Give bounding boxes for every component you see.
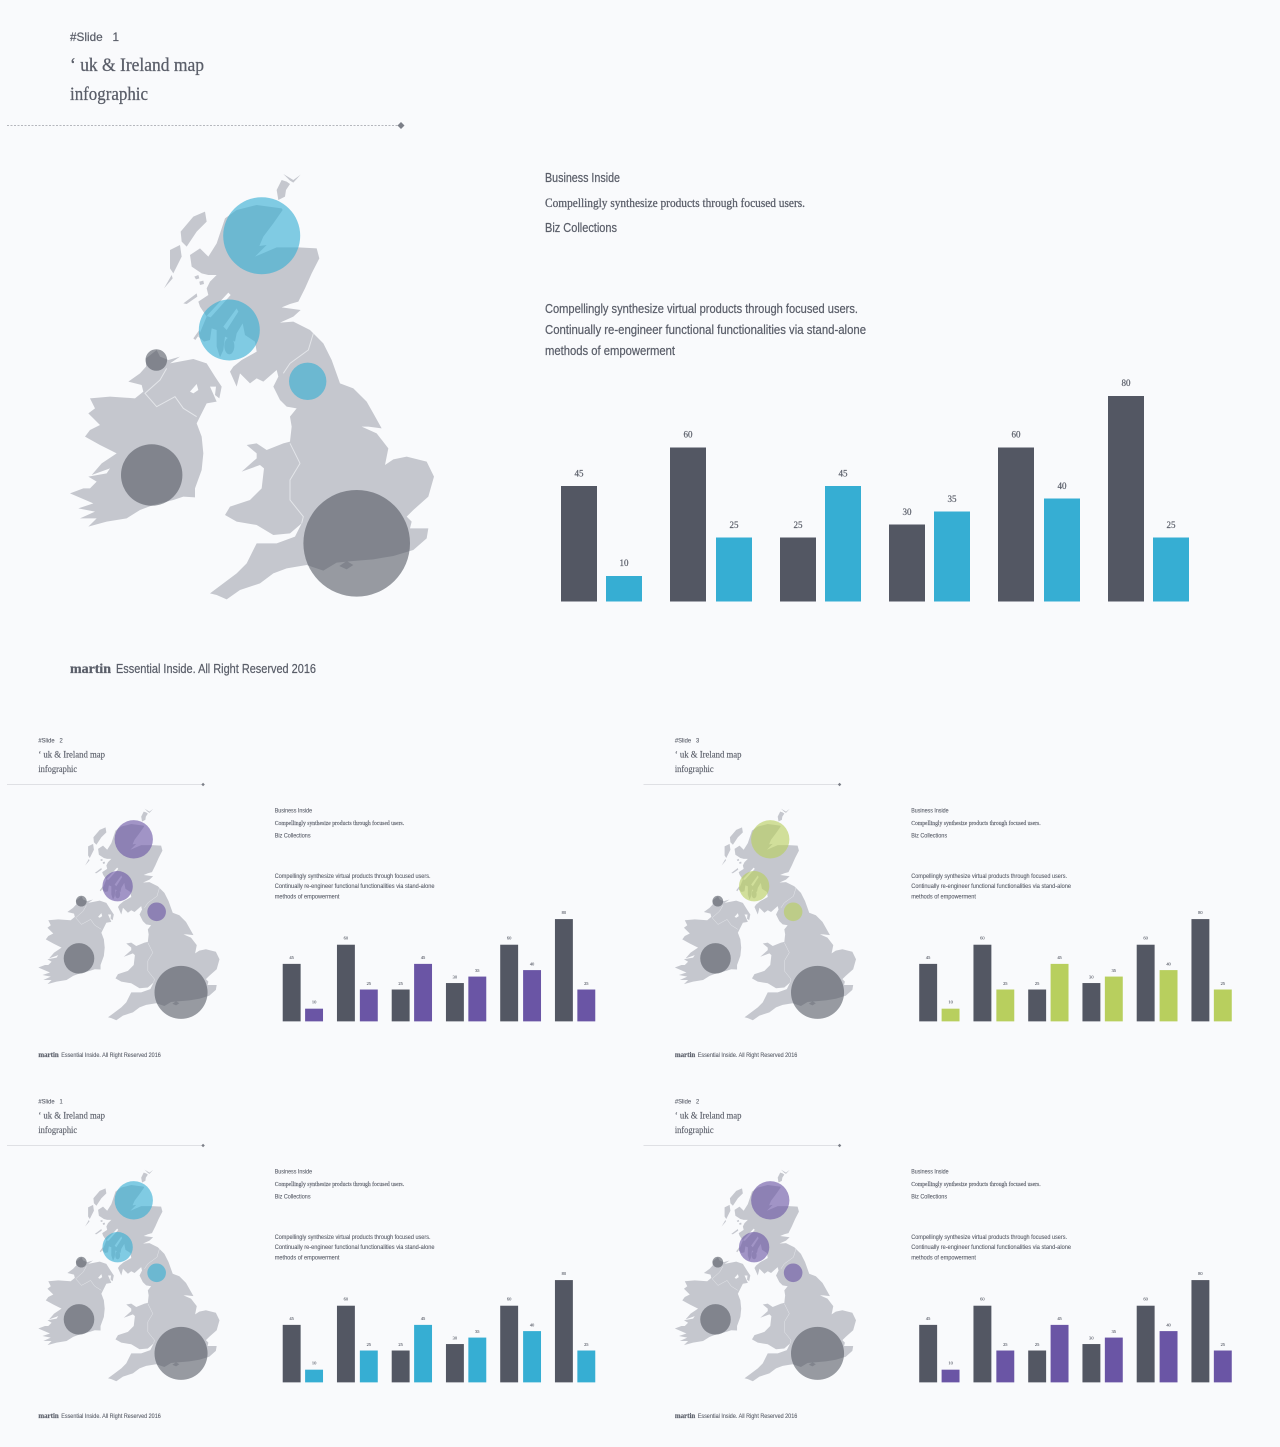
bar chart: 60 (344, 1297, 349, 1302)
text block: description: Continually re-engineer functional functionalities via stand-alone (545, 323, 866, 337)
divider with diamond (7, 122, 404, 129)
bar chart: 25 (1003, 981, 1008, 986)
footer: martin (675, 1412, 695, 1420)
bar chart: 25 (584, 981, 589, 986)
bar chart: 45 (289, 1316, 295, 1321)
footer: martin (38, 1051, 59, 1059)
bar chart: 25 (1221, 1342, 1226, 1347)
text block: business inside: Business Inside (911, 1169, 949, 1176)
text block: description: Compellingly synthesize virtual products through focused users. (275, 1234, 431, 1241)
bar chart (919, 1271, 1232, 1382)
bar chart: 25 (398, 1342, 404, 1347)
slide heading: ‘ uk & Ireland map (675, 1111, 742, 1121)
text block: business inside (545, 171, 805, 235)
text block: business inside: Compellingly synthesize products through focused users. (275, 1181, 405, 1188)
divider with diamond (7, 1144, 205, 1147)
text block: business inside: Business Inside (275, 808, 313, 815)
bar chart: 60 (507, 1297, 512, 1302)
bar chart: 80 (562, 1271, 567, 1276)
bar chart: 80 (1122, 378, 1131, 388)
bar chart: 40 (1166, 1322, 1172, 1327)
bar chart: 30 (902, 507, 912, 517)
slide heading: #Slide 3 (675, 738, 700, 744)
text block: business inside (275, 1169, 405, 1200)
divider with diamond (7, 783, 205, 786)
text block: description: Compellingly synthesize virtual products through focused users. (275, 873, 431, 880)
bar chart: 10 (620, 558, 629, 568)
bar chart: 60 (507, 936, 512, 941)
slide heading: #Slide 1 (70, 30, 119, 44)
bar chart: 35 (1112, 968, 1117, 973)
text block: business inside: Biz Collections (911, 832, 947, 839)
bar chart: 25 (1221, 981, 1226, 986)
slide heading (38, 738, 105, 775)
text block: business inside: Compellingly synthesize products through focused users. (911, 820, 1041, 827)
bar chart: 35 (475, 968, 480, 973)
slide heading: #Slide 1 (38, 1099, 63, 1105)
text block: description: Continually re-engineer functional functionalities via stand-alone (275, 1244, 435, 1251)
text block: business inside: Business Inside (275, 1169, 313, 1176)
text block: description: methods of empowerment (275, 1255, 340, 1262)
text block: business inside: Compellingly synthesize products through focused users. (911, 1181, 1041, 1188)
slide heading: ‘ uk & Ireland map (38, 750, 105, 760)
footer (38, 1412, 161, 1420)
text block: business inside: Biz Collections (545, 221, 617, 235)
slide 3 (small, green) (643, 738, 1232, 1059)
bar chart: 40 (530, 1322, 535, 1327)
text block: business inside (911, 1169, 1041, 1200)
footer (70, 662, 316, 677)
footer: Essential Inside. All Right Reserved 2016 (61, 1413, 161, 1420)
bar chart: 10 (312, 1361, 317, 1366)
slide heading (38, 1099, 105, 1136)
footer: martin (70, 662, 111, 677)
bar chart: 25 (367, 1342, 372, 1347)
slide heading (70, 30, 204, 105)
bar chart: 30 (1089, 1335, 1094, 1340)
text block: description: Compellingly synthesize virtual products through focused users. (911, 873, 1067, 880)
footer: Essential Inside. All Right Reserved 2016 (698, 1413, 798, 1420)
footer: Essential Inside. All Right Reserved 2016 (698, 1052, 798, 1059)
text block: description: Compellingly synthesize virtual products through focused users. (545, 302, 858, 316)
text block: business inside: Biz Collections (275, 1193, 311, 1200)
bar chart: 35 (948, 494, 957, 504)
divider with diamond (643, 783, 841, 786)
slide heading: infographic (38, 764, 77, 775)
bar chart: 80 (562, 910, 567, 915)
bar chart: 35 (1112, 1329, 1117, 1334)
bar chart: 25 (1003, 1342, 1008, 1347)
bar chart: 60 (344, 936, 349, 941)
text block: description: methods of empowerment (545, 344, 675, 358)
text block: business inside: Biz Collections (911, 1193, 947, 1200)
bar chart: 45 (421, 955, 426, 960)
slide heading (675, 1099, 742, 1136)
slide heading: infographic (38, 1125, 77, 1136)
slide heading: #Slide 2 (675, 1099, 700, 1105)
text block: business inside: Business Inside (545, 171, 620, 185)
footer (675, 1412, 798, 1420)
bar chart: 25 (794, 520, 803, 530)
text block: description (545, 302, 866, 358)
slide heading: infographic (675, 764, 714, 775)
bar chart: 25 (1035, 1342, 1040, 1347)
footer: martin (675, 1051, 695, 1059)
bar chart: 40 (1058, 481, 1067, 491)
bar chart: 45 (838, 468, 848, 478)
footer (675, 1051, 798, 1059)
text block: description (911, 1234, 1071, 1262)
bar chart: 35 (475, 1329, 480, 1334)
bar chart: 45 (926, 1316, 931, 1321)
footer: Essential Inside. All Right Reserved 2016 (61, 1052, 161, 1059)
bar chart: 25 (367, 981, 372, 986)
bar chart: 80 (1198, 910, 1203, 915)
bar chart: 10 (948, 1000, 954, 1005)
bar chart: 10 (948, 1361, 954, 1366)
map of UK and Ireland with bubbles (38, 809, 219, 1020)
slide heading: ‘ uk & Ireland map (675, 750, 742, 760)
text block: description: Continually re-engineer functional functionalities via stand-alone (911, 1244, 1071, 1251)
bar chart: 25 (1166, 520, 1176, 530)
bar chart: 60 (1012, 430, 1021, 440)
slide 1 (large, blue) (7, 30, 1189, 677)
text block: description: Compellingly synthesize virtual products through focused users. (911, 1234, 1067, 1241)
text block: business inside (911, 808, 1041, 839)
bar chart: 40 (530, 961, 535, 966)
bar chart (283, 910, 595, 1021)
slide 5 (small, purple) (643, 1099, 1232, 1420)
bar chart: 60 (1143, 1297, 1149, 1302)
footer (38, 1051, 161, 1059)
footer: martin (38, 1412, 59, 1420)
slide 2 (small, purple) (7, 738, 595, 1059)
bar chart: 25 (1035, 981, 1040, 986)
bar chart: 60 (980, 936, 985, 941)
text block: description (275, 1234, 435, 1262)
footer: Essential Inside. All Right Reserved 2016 (116, 662, 316, 676)
text block: description: Continually re-engineer functional functionalities via stand-alone (275, 883, 435, 890)
bar chart: 45 (1057, 955, 1063, 960)
slide heading: infographic (675, 1125, 714, 1136)
bar chart: 45 (574, 468, 584, 478)
bar chart: 45 (926, 955, 931, 960)
bar chart: 40 (1166, 961, 1172, 966)
text block: business inside: Biz Collections (275, 832, 311, 839)
bar chart: 80 (1198, 1271, 1203, 1276)
text block: description: methods of empowerment (911, 1255, 976, 1262)
slide heading: ‘ uk & Ireland map (70, 55, 204, 76)
bar chart: 45 (421, 1316, 426, 1321)
bar chart: 25 (398, 981, 404, 986)
bar chart: 30 (453, 1335, 458, 1340)
bar chart (919, 910, 1232, 1021)
bar chart: 60 (1143, 936, 1149, 941)
map of UK and Ireland with bubbles (38, 1170, 219, 1381)
map of UK and Ireland with bubbles (675, 809, 856, 1020)
bar chart: 25 (730, 520, 739, 530)
divider with diamond (643, 1144, 841, 1147)
bar chart: 60 (980, 1297, 985, 1302)
bar chart: 25 (584, 1342, 589, 1347)
text block: business inside: Compellingly synthesize products through focused users. (275, 820, 405, 827)
bar chart: 30 (453, 974, 458, 979)
map of UK and Ireland with bubbles (70, 174, 434, 599)
bar chart: 10 (312, 1000, 317, 1005)
text block: description (275, 873, 435, 901)
text block: business inside: Business Inside (911, 808, 949, 815)
bar chart (283, 1271, 595, 1382)
map of UK and Ireland with bubbles (675, 1170, 856, 1381)
bar chart (561, 378, 1189, 602)
bar chart: 60 (684, 430, 693, 440)
slide heading (675, 738, 742, 775)
text block: business inside: Compellingly synthesize products through focused users. (545, 196, 805, 210)
bar chart: 45 (289, 955, 295, 960)
bar chart: 45 (1057, 1316, 1063, 1321)
text block: description: Continually re-engineer functional functionalities via stand-alone (911, 883, 1071, 890)
slide heading: ‘ uk & Ireland map (38, 1111, 105, 1121)
slide heading: #Slide 2 (38, 738, 63, 744)
bar chart: 30 (1089, 974, 1094, 979)
slide 4 (small, blue) (7, 1099, 595, 1420)
text block: business inside (275, 808, 405, 839)
text block: description: methods of empowerment (911, 894, 976, 901)
slide heading: infographic (70, 84, 148, 105)
text block: description (911, 873, 1071, 901)
text block: description: methods of empowerment (275, 894, 340, 901)
